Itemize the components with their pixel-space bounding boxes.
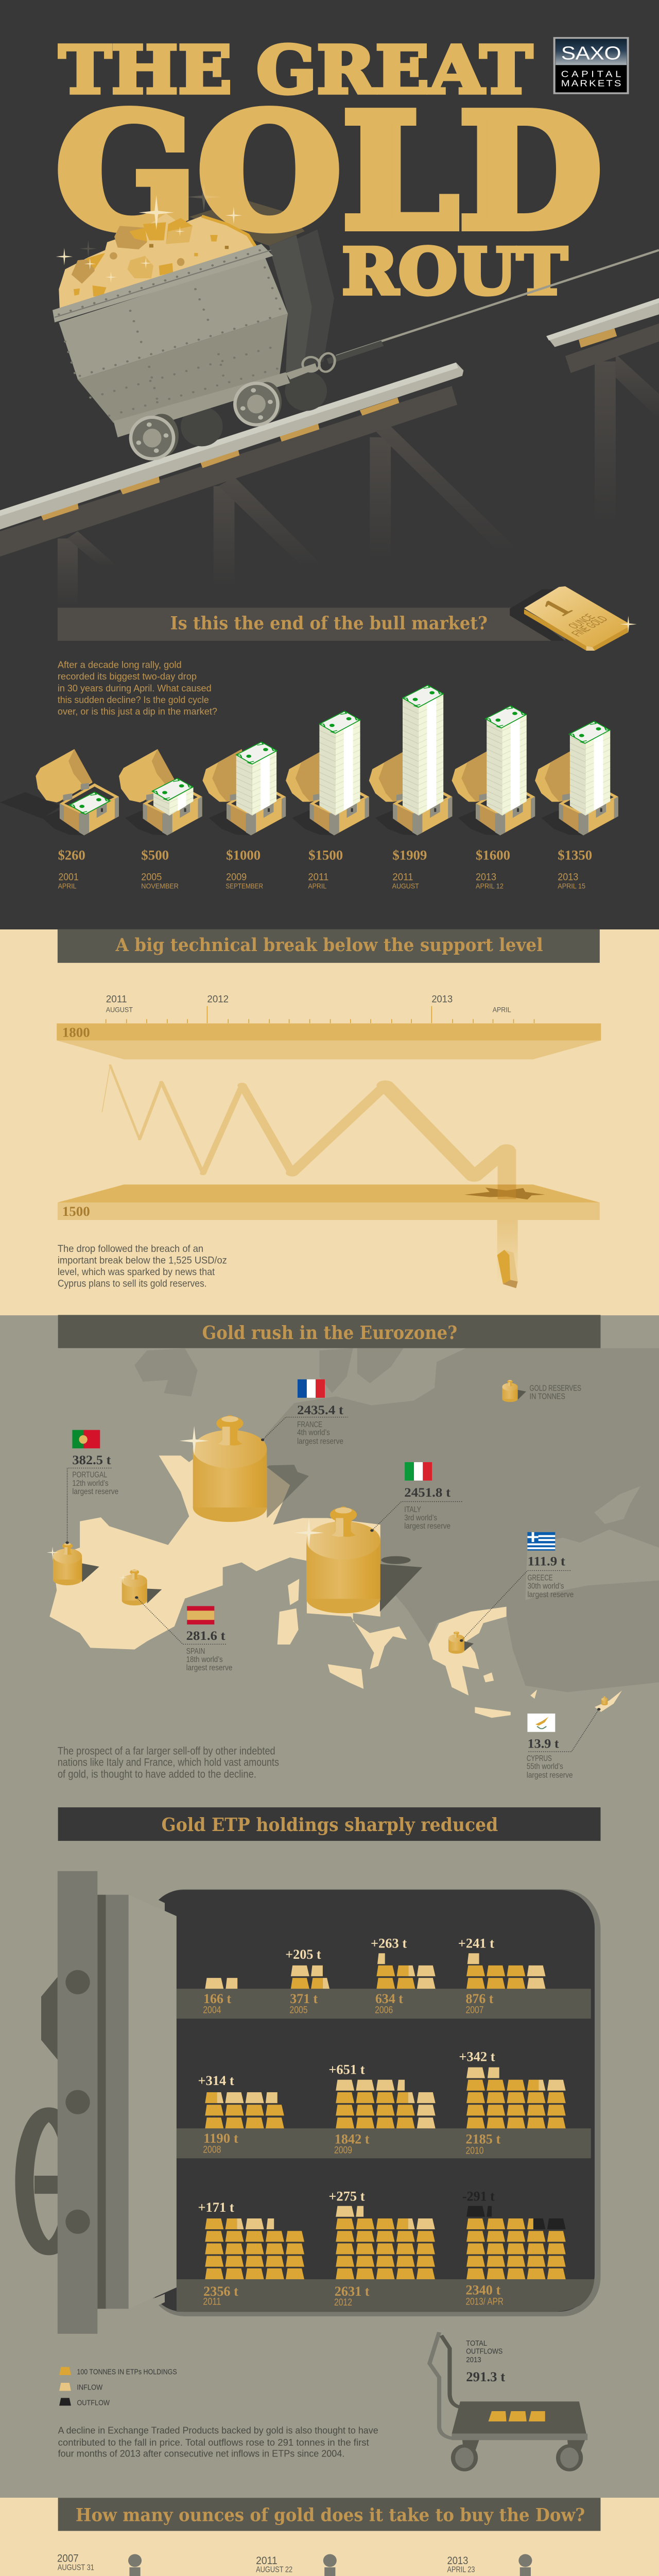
flow labels: +171 t (198, 2200, 234, 2215)
chain link (300, 352, 337, 374)
panel: ETP legend, text and trolley (51, 2332, 608, 2576)
heading band (58, 929, 600, 963)
title: GOLD: GOLD (56, 79, 602, 264)
callout: total outflows: 291.3 t (466, 2369, 506, 2384)
holdings labels: 2340 t (465, 2282, 501, 2297)
chest 2005 (119, 749, 202, 835)
callout: total outflows: TOTAL (466, 2339, 487, 2348)
steel cable (336, 250, 659, 356)
legend labels (77, 2368, 177, 2407)
panel: technical break (57, 929, 601, 1289)
holdings labels: 166 t (203, 1991, 232, 2006)
label: Portugal: PORTUGAL (72, 1470, 107, 1479)
cart wheels (129, 382, 282, 461)
panel: ETP vault (24, 1807, 600, 2334)
bars 2010 (466, 2067, 566, 2128)
year labels: 2004 (203, 2004, 221, 2015)
body text: The prospect of a far larger sell-off by other indebted (58, 1745, 275, 1757)
body text: The drop followed the breach of an (58, 1243, 203, 1254)
label: Spain (186, 1629, 232, 1672)
bars 2005 (291, 1965, 330, 1989)
flow labels: +275 t (328, 2189, 365, 2204)
legend labels: OUTFLOW (77, 2399, 110, 2407)
intro text: in 30 years during April. What caused (58, 683, 212, 693)
trolley with gold bars (429, 2332, 587, 2470)
mine cart motion ghost (181, 199, 383, 446)
label: Spain: 281.6 t (186, 1629, 226, 1643)
label: Portugal: 12th world’s (72, 1478, 109, 1487)
label: Portugal: 382.5 t (72, 1453, 111, 1467)
year labels: 2007 (465, 2004, 484, 2015)
heading band (58, 607, 565, 641)
weight: Greece (448, 1631, 464, 1654)
date labels: 2013 (558, 871, 578, 883)
flow labels: +205 t (285, 1947, 321, 1962)
date labels (58, 871, 585, 890)
date labels: 2001 (58, 871, 79, 883)
mine cart body (53, 244, 317, 437)
year labels (203, 2004, 504, 2308)
holdings labels: 2356 t (203, 2283, 238, 2299)
title: ROUT: ROUT (342, 234, 567, 309)
body text: Cyprus plans to sell its gold reserves. (58, 1278, 207, 1289)
flag: Spain (187, 1606, 214, 1624)
line chart: gold price (102, 1065, 507, 1177)
panel: is this the end of the bull market (0, 586, 637, 890)
resistance plate 1800 (57, 1023, 601, 1059)
callout: total outflows: 2013 (466, 2355, 481, 2364)
icon: one ounce gold bar: 1 (532, 594, 582, 621)
date labels: APRIL (308, 883, 326, 890)
holdings labels: 2631 t (335, 2283, 370, 2299)
label: Cyprus: CYPRUS (527, 1753, 552, 1762)
body text: of gold, is thought to have added to the decline. (58, 1768, 256, 1781)
leader lines (67, 1417, 599, 1752)
intro text: recorded its biggest two-day drop (58, 671, 197, 682)
date labels: 2011 (308, 871, 328, 883)
body text (58, 2425, 378, 2459)
legend: gold reserves: IN TONNES (530, 1392, 565, 1401)
body text: A decline in Exchange Traded Products backed by gold is also thought to have (58, 2425, 378, 2436)
timeline labels: AUGUST (106, 1006, 133, 1014)
vault interior (147, 1889, 600, 2316)
bars 2013 (466, 2206, 566, 2279)
label: Greece: GREECE (527, 1573, 552, 1582)
label: Spain: 18th world’s (186, 1654, 223, 1664)
bars 2009 (336, 2080, 436, 2128)
body text (58, 1745, 279, 1781)
shelf 2 (177, 2128, 591, 2158)
label: Greece: 30th world’s (527, 1581, 564, 1590)
label: Cyprus (527, 1737, 573, 1780)
heading text: Gold rush in the Eurozone? (202, 1321, 457, 1344)
flow labels: +314 t (198, 2073, 234, 2088)
icon: one ounce gold bar: OUNCE (566, 613, 598, 631)
price labels: $1600 (476, 848, 510, 862)
holdings labels: 371 t (290, 1991, 318, 2006)
panel: eurozone (47, 1315, 659, 1781)
year labels: 2006 (375, 2004, 393, 2015)
weight shadows (82, 1390, 526, 1651)
label: Spain: SPAIN (186, 1646, 205, 1655)
flow labels (198, 1936, 495, 2215)
crack in support (464, 1188, 545, 1199)
shelf 1 (177, 1989, 591, 2019)
scale labels: 2011 (256, 2555, 278, 2567)
sparkles (56, 182, 242, 283)
price labels: $500 (141, 848, 169, 862)
price labels: $1909 (392, 848, 427, 862)
price labels (58, 848, 592, 862)
year labels: 2005 (289, 2004, 308, 2015)
vault door frame (58, 1871, 177, 2334)
label: France: largest reserve (297, 1436, 343, 1446)
holdings labels: 1190 t (203, 2131, 239, 2146)
body text: contributed to the fall in price. Total outflows rose to 291 tonnes in the first (58, 2437, 369, 2448)
scale labels: AUGUST 31 (58, 2563, 94, 2572)
heading band (58, 1807, 600, 1841)
logo: Saxo Capital Markets: SAXO (561, 43, 621, 64)
date labels: APRIL 15 (558, 883, 585, 890)
logo: Saxo Capital Markets: MARKETS (561, 79, 621, 89)
scale 2007 (51, 2554, 218, 2576)
heading band (58, 1315, 600, 1348)
legend swatches (59, 2367, 71, 2405)
flow labels: +263 t (371, 1936, 407, 1951)
chest 2009 (202, 742, 286, 835)
background: mine section (0, 0, 659, 929)
bars 2012 (336, 2206, 435, 2279)
map: sea of Azov (594, 1486, 640, 1524)
flag: Portugal (72, 1430, 100, 1448)
scale labels: AUGUST 22 (256, 2565, 292, 2574)
gold ore pile (55, 213, 257, 311)
timeline labels: 2013 (431, 993, 453, 1005)
weight: France (193, 1415, 267, 1522)
weight sparkles (47, 1426, 324, 1582)
logo: Saxo Capital Markets (554, 38, 628, 93)
weight: Cyprus (601, 1697, 608, 1705)
bars 2007 (466, 1953, 546, 1989)
year labels: 2008 (203, 2144, 221, 2155)
intro text: After a decade long rally, gold (58, 659, 182, 670)
chest April 2011 (286, 711, 369, 835)
label: France (297, 1403, 343, 1446)
date labels: APRIL 12 (476, 883, 504, 890)
flow labels: +342 t (459, 2049, 495, 2064)
scale labels (57, 2552, 598, 2576)
scale labels: 2013 (447, 2555, 468, 2567)
holdings labels: 876 t (465, 1991, 494, 2006)
icon: one ounce gold bar: FINE GOLD (569, 615, 611, 638)
callout: total outflows (466, 2339, 506, 2384)
date labels: AUGUST (392, 883, 419, 890)
leader dots (65, 1438, 600, 1710)
support plate 1500: 1500 (62, 1204, 90, 1219)
bars 2004 (205, 1978, 237, 1989)
date labels: 2009 (226, 871, 247, 883)
legend labels: INFLOW (77, 2383, 102, 2392)
label: France: 4th world’s (297, 1428, 330, 1437)
trestle supports (58, 354, 659, 607)
background: eurozone and ETP section (0, 1315, 659, 2498)
scale labels: 2007 (57, 2552, 79, 2565)
bars 2011 (205, 2218, 304, 2279)
timeline ticks (106, 1006, 534, 1023)
date labels: 2011 (392, 871, 413, 883)
map: highlighted countries (49, 1455, 622, 1718)
resistance plate 1800: 1800 (62, 1025, 90, 1040)
scale labels: APRIL 23 (447, 2565, 475, 2574)
year labels: 2011 (203, 2296, 221, 2307)
price labels: $260 (58, 848, 85, 862)
chest August 2011 (369, 685, 452, 835)
timeline labels: APRIL (493, 1006, 511, 1014)
label: Italy: 3rd world’s (404, 1513, 437, 1522)
flag: Greece (527, 1532, 555, 1551)
holdings labels: 1842 t (335, 2131, 370, 2147)
label: Cyprus: 13.9 t (527, 1737, 559, 1751)
label: Spain: largest reserve (186, 1663, 232, 1672)
label: Italy: 2451.8 t (404, 1485, 450, 1500)
chest April 15 2013 (535, 721, 618, 835)
background: technical break section (0, 929, 659, 1315)
label: Italy: ITALY (404, 1504, 421, 1514)
price labels: $1000 (226, 848, 261, 862)
body text: important break below the 1,525 USD/oz (58, 1255, 227, 1266)
label: France: FRANCE (297, 1419, 322, 1429)
legend: gold reserves: GOLD RESERVES (530, 1383, 581, 1393)
price line breaking through support (497, 1149, 518, 1284)
holdings labels: 634 t (375, 1991, 403, 2006)
label: Portugal (72, 1453, 118, 1496)
chest 2001 (36, 749, 119, 835)
year labels: 2009 (334, 2144, 352, 2156)
bars 2006 (376, 1953, 436, 1989)
flow labels: +651 t (328, 2062, 365, 2077)
legend: gold reserves (530, 1383, 581, 1401)
label: Cyprus: 55th world’s (527, 1761, 563, 1771)
bars 2008 (205, 2092, 284, 2128)
date labels: 2005 (141, 871, 162, 883)
price labels: $1350 (558, 848, 592, 862)
vault latch (41, 1977, 58, 2060)
timeline labels: 2011 (106, 993, 127, 1005)
body text: nations like Italy and France, which hold vast amounts (58, 1756, 279, 1769)
weight: Spain (122, 1569, 147, 1605)
heading band (58, 2498, 600, 2531)
holdings labels: 2185 t (465, 2131, 501, 2147)
weight: legend (502, 1380, 518, 1402)
shelf 3 (177, 2279, 594, 2312)
label: Greece: largest reserve (527, 1589, 574, 1599)
label: Italy: largest reserve (404, 1521, 450, 1530)
flag: Cyprus (527, 1714, 555, 1732)
flag: France (298, 1379, 325, 1398)
map: surrounding land (134, 1348, 659, 1692)
broken rail: far section (546, 298, 659, 373)
intro text: over, or is this just a dip in the market? (58, 706, 217, 717)
scale 2011 (246, 2554, 413, 2576)
title: THE GREAT: THE GREAT (59, 32, 532, 109)
date labels: NOVEMBER (141, 883, 179, 890)
chest April 2013 (452, 706, 535, 835)
intro text: this sudden decline? Is the gold cycle (58, 694, 209, 705)
flow labels: +241 t (458, 1936, 495, 1951)
callout: total outflows: OUTFLOWS (466, 2347, 502, 2355)
body text: level, which was sparked by news that (58, 1266, 215, 1277)
flow labels: -291 t (462, 2189, 495, 2204)
panel: hero (0, 32, 659, 607)
label: Greece: 111.9 t (527, 1554, 565, 1568)
year labels: 2012 (334, 2297, 352, 2308)
weight: Italy (306, 1506, 380, 1613)
label: Cyprus: largest reserve (527, 1770, 573, 1780)
flag: Italy (405, 1462, 432, 1481)
year labels: 2010 (465, 2145, 484, 2156)
label: Italy (404, 1485, 450, 1530)
holdings labels (203, 1991, 501, 2299)
weight: Portugal (53, 1543, 82, 1585)
year labels: 2013/ APR (465, 2296, 504, 2307)
background: dow and outlook section (0, 2498, 659, 2576)
support plate 1500 (58, 1184, 600, 1220)
icon: one ounce gold bar (510, 586, 637, 651)
broken rail: near section (0, 363, 463, 556)
date labels: SEPTEMBER (226, 883, 263, 890)
legend labels: 100 TONNES IN ETPs HOLDINGS (77, 2368, 177, 2376)
date labels: APRIL (58, 883, 77, 890)
body text: four months of 2013 after consecutive net inflows in ETPs since 2004. (58, 2448, 344, 2459)
label: Portugal: largest reserve (72, 1486, 118, 1496)
logo: Saxo Capital Markets: CAPITAL (561, 70, 621, 79)
scale 2013 (442, 2554, 608, 2576)
timeline labels (106, 993, 511, 1014)
label: Greece (527, 1554, 574, 1599)
price labels: $1500 (308, 848, 343, 862)
chart: shadow of first chest lid (0, 792, 61, 819)
intro text (58, 659, 217, 717)
date labels: 2013 (476, 871, 496, 883)
icon: falling gold bar (497, 1250, 518, 1288)
body text (58, 1243, 227, 1289)
vault handle wheel (24, 2114, 73, 2248)
label: France: 2435.4 t (297, 1403, 343, 1417)
heading text: Gold ETP holdings sharply reduced (161, 1814, 498, 1836)
timeline labels: 2012 (207, 993, 229, 1005)
